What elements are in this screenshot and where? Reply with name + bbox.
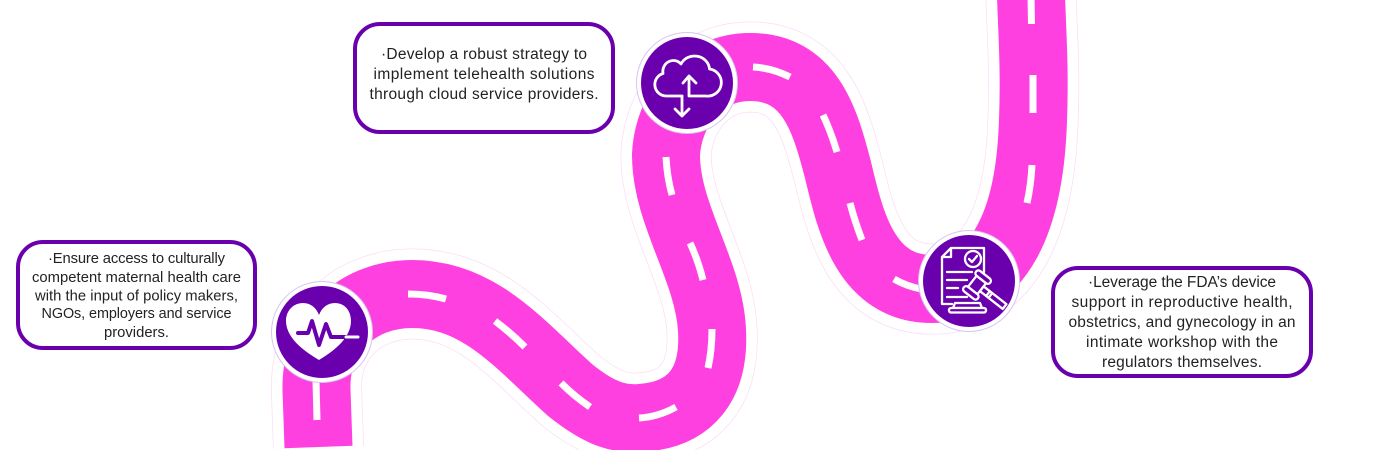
callout: maternal health: with the input of policy makers,	[34, 288, 238, 304]
callout: FDA workshop: support in reproductive health,	[1072, 294, 1292, 311]
icon: document and gavel	[918, 230, 1020, 332]
callout: FDA workshop: ·Leverage the FDA’s device	[1088, 274, 1276, 291]
callout: FDA workshop: obstetrics, and gynecology in an	[1068, 314, 1296, 331]
callout: maternal health: providers.	[104, 325, 169, 341]
callout: FDA workshop: intimate workshop with the	[1086, 334, 1278, 351]
callout: telehealth	[355, 24, 613, 132]
road	[316, 0, 1034, 447]
callout: maternal health: competent maternal health care	[32, 270, 241, 286]
callout: maternal health	[18, 242, 255, 348]
icon: heart with pulse	[271, 281, 373, 383]
icon: cloud with arrows	[636, 32, 738, 134]
callout: telehealth: ·Develop a robust strategy to	[381, 46, 587, 63]
callout: maternal health: ·Ensure access to culturally	[48, 251, 226, 267]
callout: telehealth: implement telehealth solutions	[374, 66, 595, 83]
callout: telehealth: through cloud service providers.	[370, 86, 598, 103]
callout: FDA workshop: regulators themselves.	[1102, 354, 1262, 371]
callout: FDA workshop	[1053, 268, 1311, 376]
callout: maternal health: NGOs, employers and service	[42, 306, 232, 322]
